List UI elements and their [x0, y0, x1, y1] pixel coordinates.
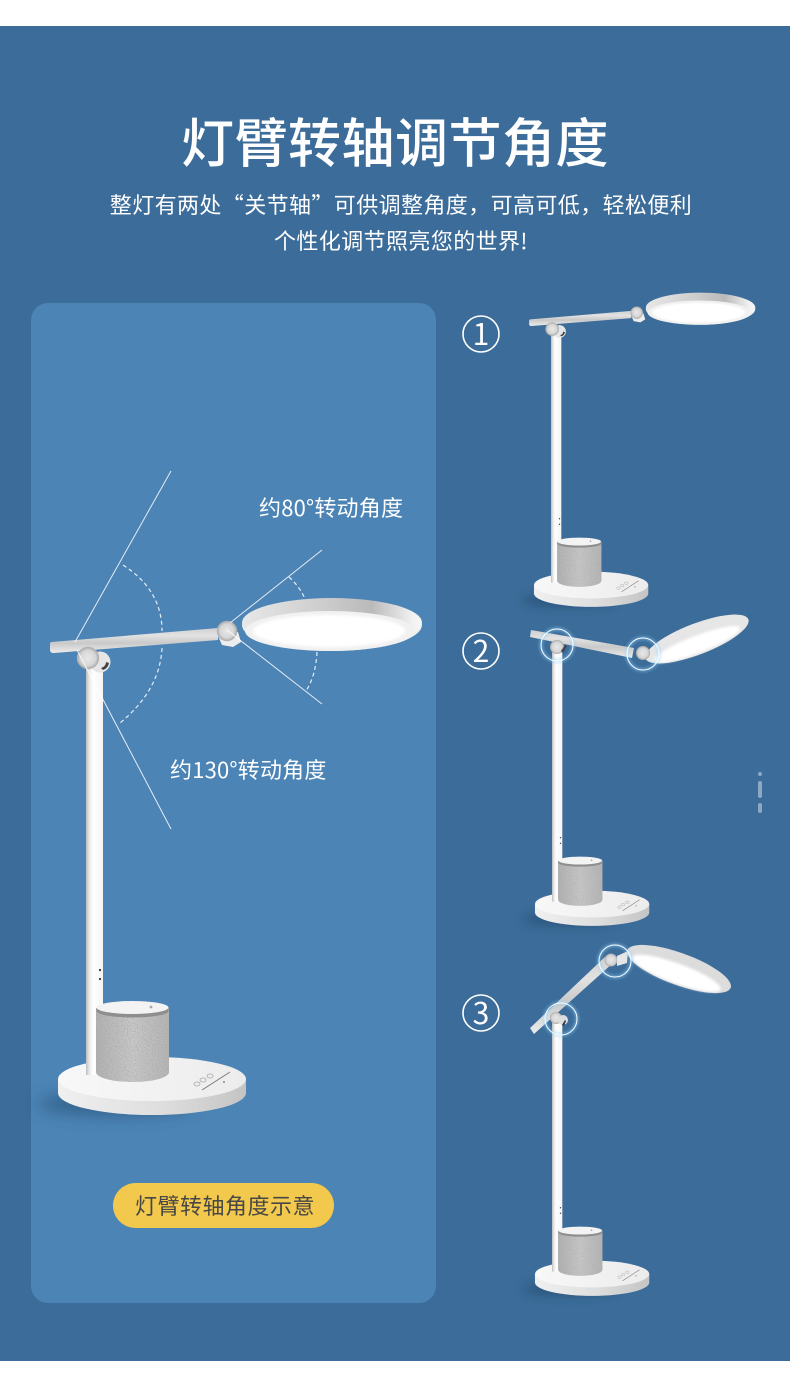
caption pill: [113, 1183, 334, 1228]
number badge 1: [463, 310, 499, 354]
lamp position 3: [523, 935, 736, 1296]
joint highlight circles: [541, 629, 659, 670]
number badge 3: [463, 989, 499, 1033]
lamp position 2: [523, 605, 754, 926]
scroll indicator: [758, 772, 762, 813]
label: 80 degree rotation: 约80°转动角度: [259, 491, 403, 523]
angle guides: head rotation: [227, 550, 322, 704]
title: 灯臂转轴调节角度: [181, 102, 609, 178]
label: 130 degree rotation: 约130°转动角度: [170, 753, 327, 785]
caption pill: 灯臂转轴角度示意: [135, 1189, 315, 1221]
subtitle text block: 整灯有两处“关节轴”可供调整角度，可高可低，轻松便利: [110, 188, 692, 220]
subtitle text block: 个性化调节照亮您的世界!: [274, 224, 528, 256]
large desk lamp: [38, 598, 422, 1115]
angle guides: arm rotation: [75, 471, 171, 829]
subtitle text block: [110, 188, 692, 256]
number badge 2: 2: [473, 627, 489, 671]
number badge 1: 1: [473, 310, 489, 354]
lamp position 1: [522, 293, 755, 607]
number badge 3: 3: [473, 989, 489, 1033]
number badge 2: [463, 627, 499, 671]
panel: rotation angle diagram: [31, 303, 436, 1303]
joint highlight circles: [545, 945, 631, 1035]
